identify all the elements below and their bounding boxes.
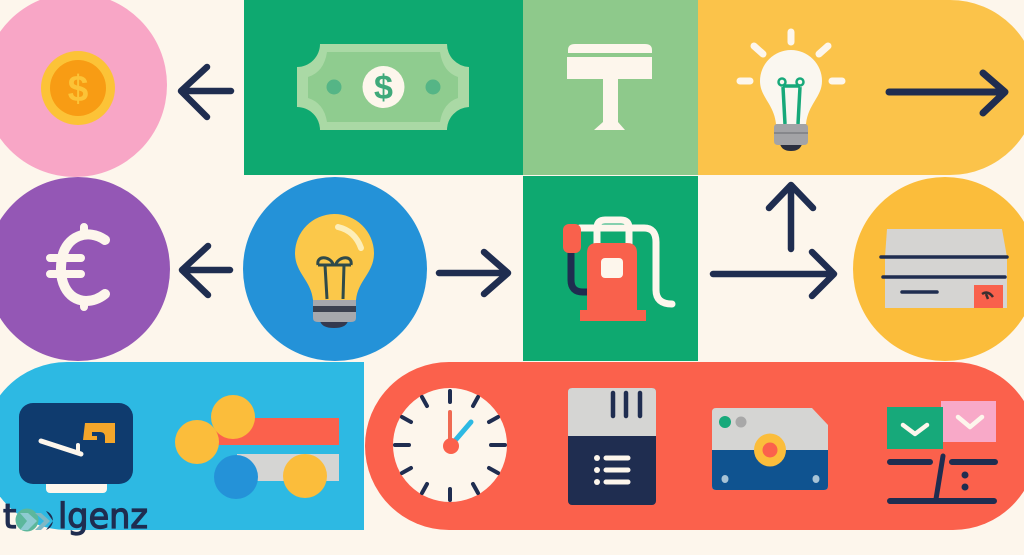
panel: yellow light bulb	[698, 0, 1024, 175]
panel: purple euro circle	[0, 177, 170, 361]
panel: blue light bulb circle	[243, 177, 427, 361]
icon: clock	[393, 388, 507, 502]
arrow: right to card circle	[713, 252, 834, 296]
icon: white light bulb	[740, 32, 842, 151]
panel: red tools band	[365, 362, 1024, 530]
icon: banknote	[297, 44, 469, 130]
icon: coins and bars	[175, 395, 339, 499]
arrow: up to yellow panel	[769, 185, 813, 249]
panel: pink coin circle	[0, 0, 167, 177]
logo: toolgenz: t	[3, 497, 16, 537]
icon: monitor	[19, 403, 133, 493]
panel: yellow card circle	[853, 177, 1024, 361]
icon: dollar coin	[41, 51, 115, 125]
icon: dollar coin: $	[68, 68, 89, 109]
logo: toolgenz	[3, 497, 148, 537]
panel: green fuel pump	[523, 176, 698, 361]
icon: storage card	[568, 388, 656, 505]
arrow: right to fuel panel	[439, 252, 508, 294]
panel: green banknote	[244, 0, 523, 175]
icon: banknote: $	[374, 69, 393, 107]
arrow: left to pink circle	[181, 67, 231, 117]
icon: stamp	[567, 44, 652, 130]
icon: euro symbol	[50, 227, 105, 307]
icon: fuel pump	[563, 220, 672, 321]
arrow: right in yellow panel	[889, 73, 1005, 113]
panel: light green stamp	[523, 0, 698, 175]
icon: card	[881, 229, 1007, 308]
icon: yellow light bulb	[295, 214, 374, 328]
icon: disk drive	[712, 408, 828, 490]
icon: check boxes and table	[887, 401, 996, 501]
logo: toolgenz: lgenz	[58, 497, 148, 537]
arrow: left to purple circle	[182, 246, 230, 295]
panel: cyan monitor and coins	[0, 362, 364, 530]
